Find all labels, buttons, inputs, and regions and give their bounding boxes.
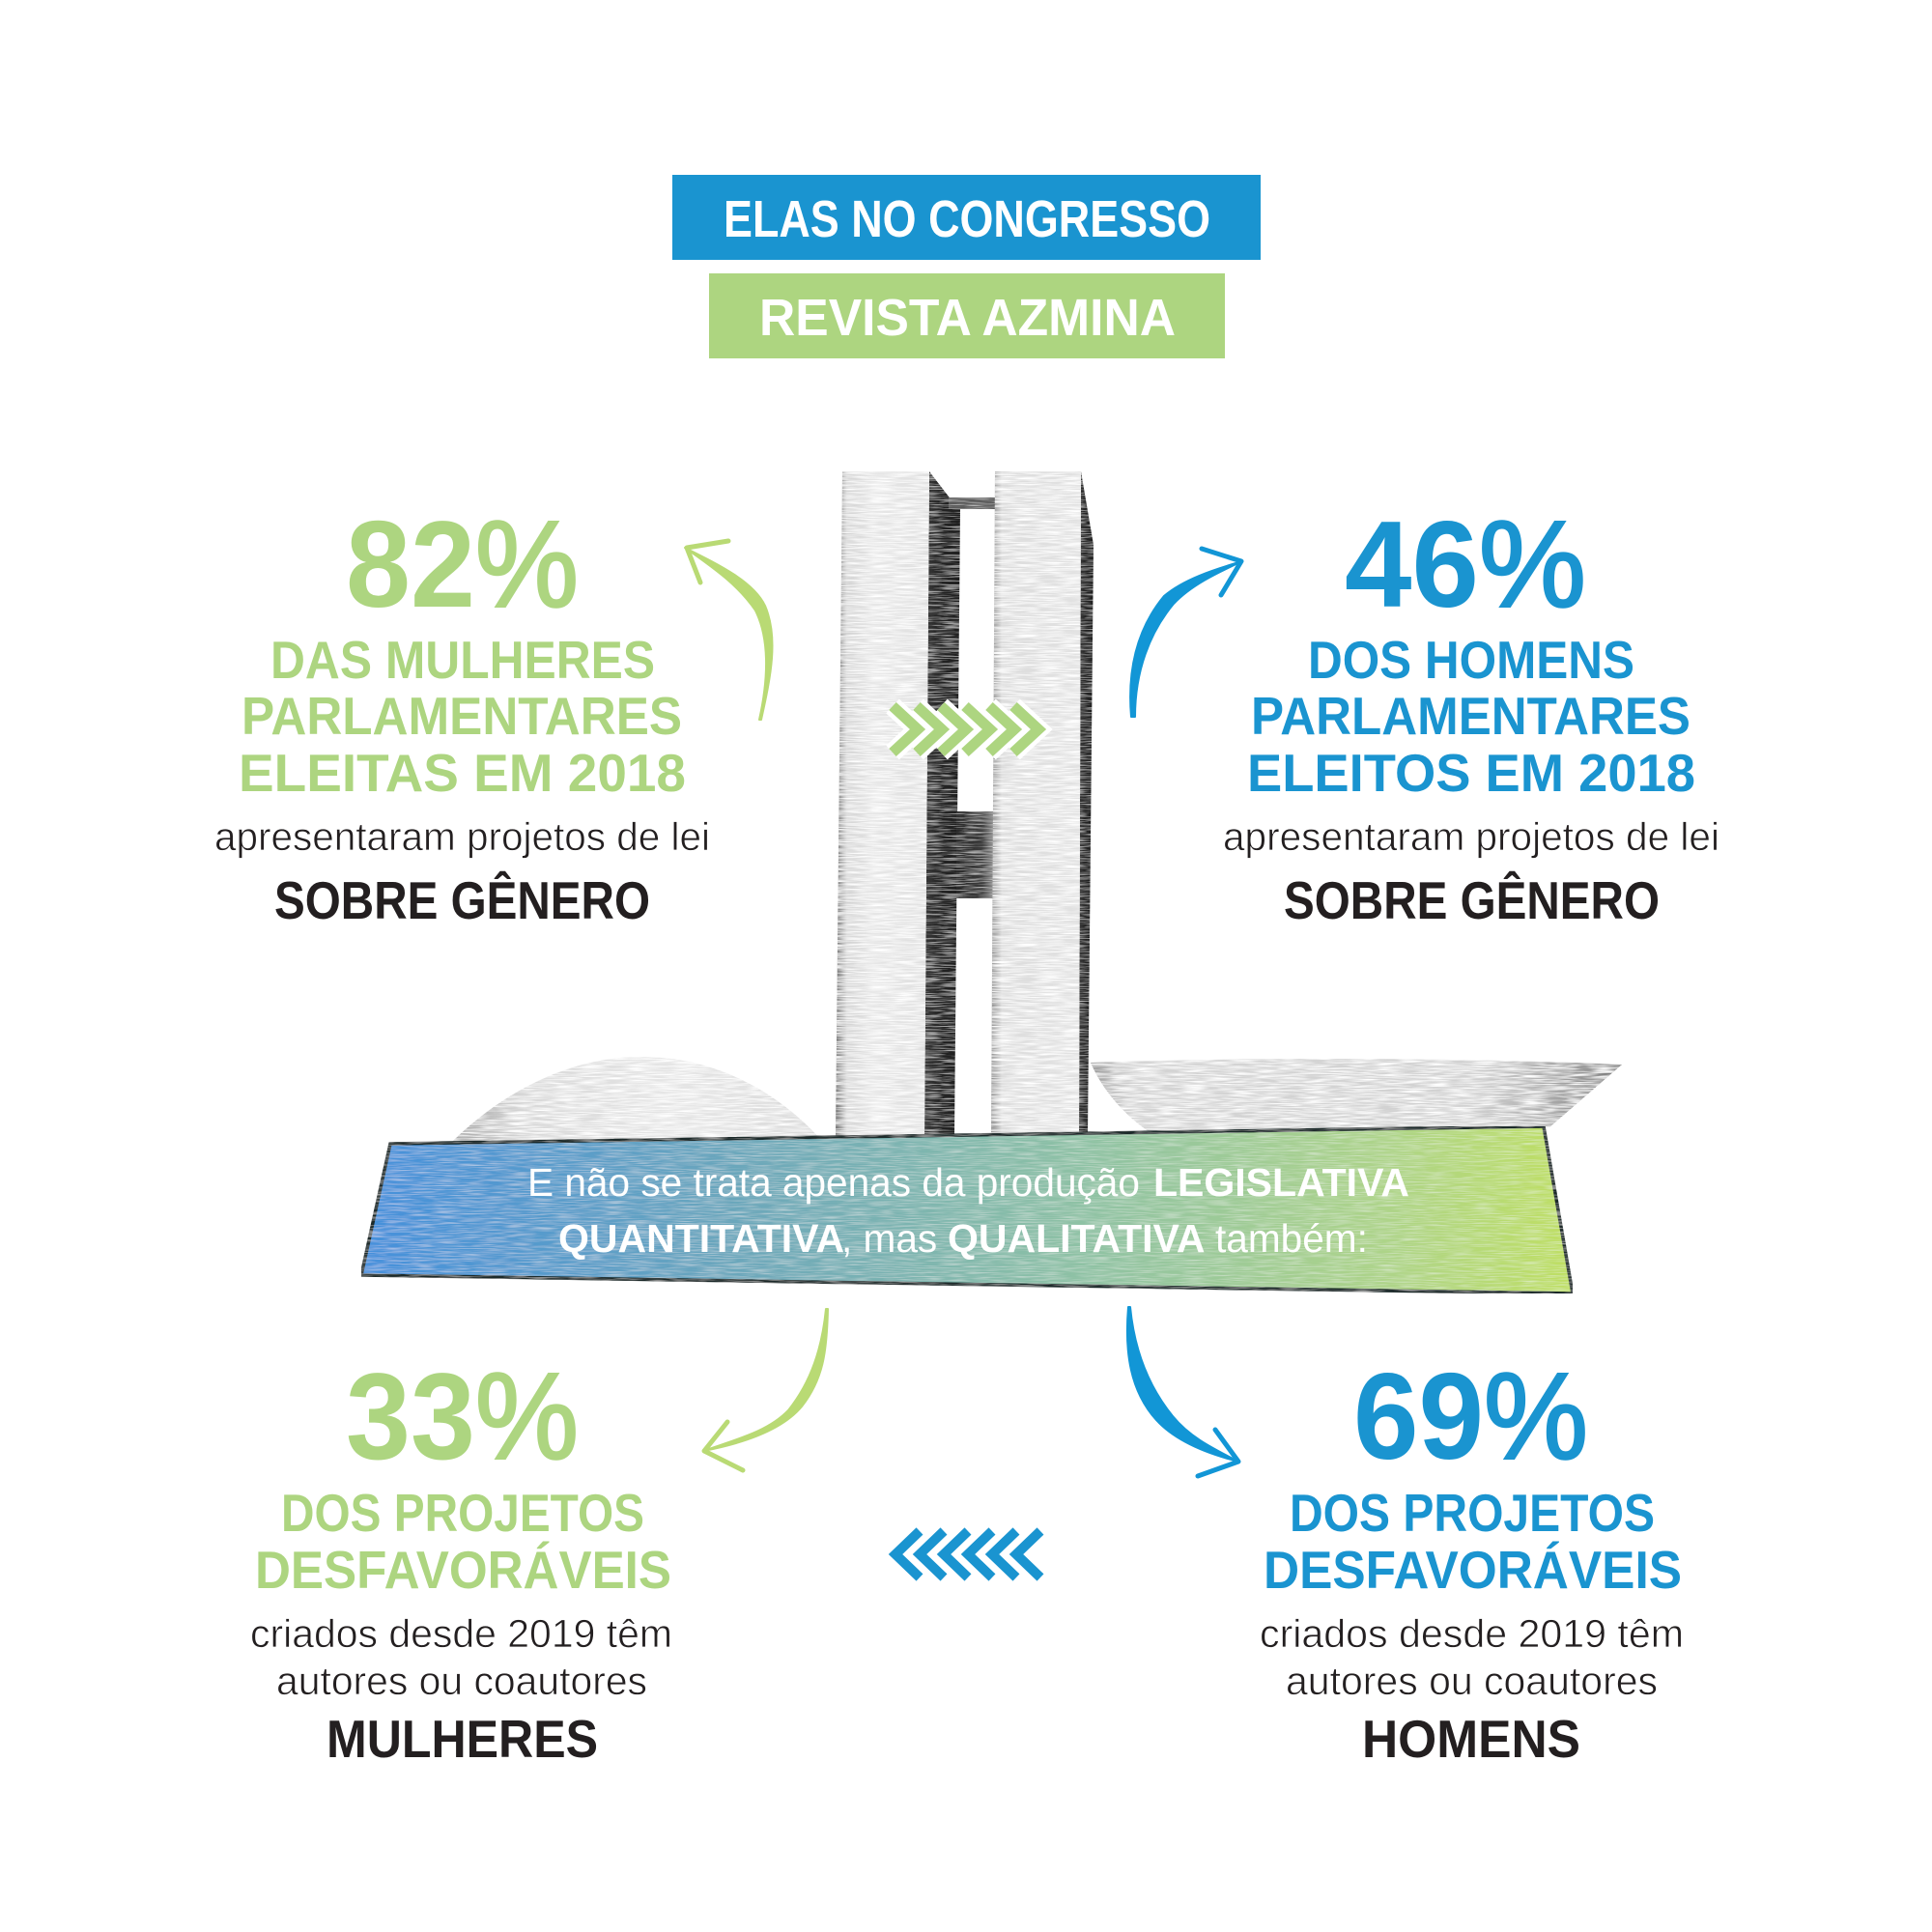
- dome of the Senate: [450, 1057, 821, 1144]
- arrow: blue down-right: [1127, 1307, 1238, 1476]
- bowl of the Chamber: [1091, 1059, 1622, 1132]
- subtitle banner: Revista AzMina: REVISTA AZMINA: [759, 289, 1176, 347]
- band text line 2: também:: [1215, 1216, 1368, 1261]
- heading: dos projetos desfavoráveis: [1264, 1483, 1682, 1600]
- left tower: [836, 471, 960, 1136]
- panel: 33% women authored: [250, 1348, 672, 1769]
- illustration: Congresso Nacional building: [450, 471, 1622, 1144]
- body text: criados desde 2019 têm: [250, 1611, 672, 1656]
- panel: 69% men authored: [1260, 1348, 1684, 1769]
- title banner: Elas no Congresso: ELAS NO CONGRESSO: [724, 190, 1210, 248]
- body text: [1260, 1611, 1684, 1703]
- heading: das mulheres parlamentares: [239, 630, 686, 803]
- central gradient band with text: [361, 1126, 1573, 1293]
- heading: dos homens parlamentares: [1247, 630, 1695, 803]
- heading: das mulheres parlamentares: PARLAMENTARES: [242, 686, 682, 746]
- arrow: green down-left: [703, 1309, 828, 1470]
- emphasis: sobre gênero: SOBRE GÊNERO: [1284, 870, 1660, 930]
- band text line 2: QUANTITATIVA: [558, 1216, 844, 1261]
- heading: dos projetos desfavoráveis: DOS PROJETOS: [281, 1483, 644, 1543]
- emphasis: sobre gênero: SOBRE GÊNERO: [274, 870, 650, 930]
- heading: dos projetos desfavoráveis: DESFAVORÁVEIS: [1264, 1540, 1682, 1600]
- arrow: green up-left: [685, 541, 773, 720]
- stat 46%: 46%: [1345, 496, 1586, 633]
- subtitle banner: Revista AzMina: [709, 273, 1225, 358]
- arrow: blue up-right: [1130, 549, 1242, 717]
- body text: criados desde 2019 têm: [1260, 1611, 1684, 1656]
- green chevrons: [893, 706, 1038, 753]
- emphasis: homens: HOMENS: [1362, 1709, 1580, 1769]
- stat 69%: 69%: [1353, 1348, 1588, 1485]
- heading: dos homens parlamentares: ELEITOS EM 2018: [1247, 743, 1695, 803]
- heading: dos homens parlamentares: PARLAMENTARES: [1251, 686, 1690, 746]
- title banner: Elas no Congresso: [672, 175, 1261, 260]
- body text: apresentaram projetos de lei: [1223, 814, 1719, 859]
- band text line 1: LEGISLATIVA: [1153, 1160, 1409, 1205]
- heading: dos projetos desfavoráveis: [255, 1483, 671, 1600]
- panel: 46% men: [1223, 496, 1719, 930]
- emphasis: mulheres: MULHERES: [327, 1709, 598, 1769]
- panel: 82% women: [214, 496, 710, 930]
- body text: autores ou coautores: [1286, 1659, 1658, 1703]
- blue chevrons: [895, 1531, 1040, 1577]
- heading: dos projetos desfavoráveis: DOS PROJETOS: [1290, 1483, 1655, 1543]
- right tower: [991, 471, 1094, 1134]
- heading: das mulheres parlamentares: ELEITAS EM 2018: [239, 743, 686, 803]
- body text: apresentaram projetos de lei: [214, 814, 710, 859]
- band text line 2: QUALITATIVA: [948, 1216, 1205, 1261]
- tower bridge middle: [956, 811, 999, 898]
- band text line 1: E não se trata apenas da produção: [527, 1160, 1151, 1205]
- stat 82%: 82%: [346, 496, 579, 633]
- heading: dos projetos desfavoráveis: DESFAVORÁVEIS: [255, 1540, 671, 1600]
- heading: dos homens parlamentares: DOS HOMENS: [1308, 630, 1634, 690]
- heading: das mulheres parlamentares: DAS MULHERES: [270, 630, 655, 690]
- band text line 2: , mas: [841, 1216, 948, 1261]
- stat 33%: 33%: [346, 1348, 579, 1485]
- tower bridge top: [949, 497, 995, 509]
- body text: [250, 1611, 672, 1703]
- body text: autores ou coautores: [276, 1659, 647, 1703]
